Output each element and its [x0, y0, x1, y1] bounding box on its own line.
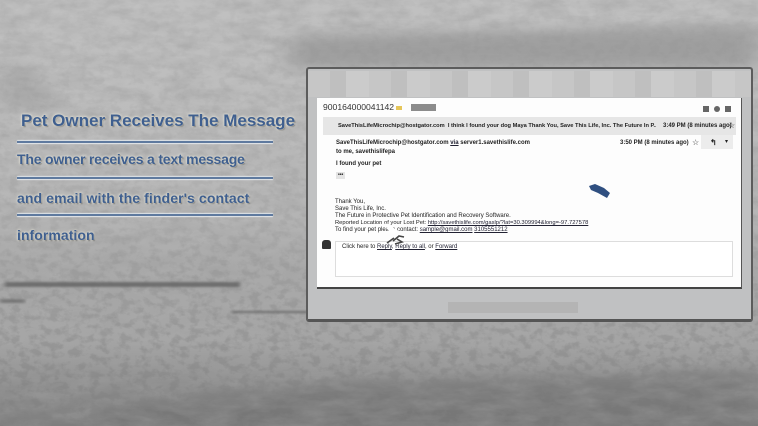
icon: folder tag [396, 106, 402, 110]
expanded message header: I found your pet [336, 161, 381, 167]
collapsed message row: 3:49 PM (8 minutes ago) [663, 123, 732, 129]
toolbar icons [703, 106, 731, 112]
expanded message header: ▾ [725, 139, 728, 145]
body line 2: and email with the finder's contact [17, 190, 249, 206]
message signature: Thank You, [335, 199, 365, 205]
body line 1: The owner receives a text message [17, 151, 245, 167]
frame shading blocks [448, 302, 578, 313]
expanded message header: SaveThisLifeMicrochip@hostgator.com via server1.savethislife.com [336, 140, 530, 146]
email id heading: 900164000041142 [323, 102, 394, 112]
icon: sender avatar [322, 240, 331, 249]
icon: cursor arrow [385, 224, 404, 245]
reply box: Click here to Reply, Reply to all, or Forward [342, 244, 457, 250]
message signature: To find your pet please contact: sample@gmail.com 3105551212 [335, 227, 508, 233]
message signature: Save This Life, Inc. [335, 206, 386, 212]
redacted label [411, 104, 436, 111]
icon: blue mark on email [589, 184, 610, 198]
email window [317, 98, 742, 289]
expanded message header: 3:50 PM (8 minutes ago) [620, 140, 689, 146]
message signature: The Future in Protective Pet Identification and Recovery Software. [335, 213, 511, 219]
expanded message header: to me, savethislifepa [336, 149, 395, 155]
body line 3: information [17, 227, 95, 243]
expanded message header: ↰ [710, 138, 717, 147]
message signature [335, 198, 588, 233]
collapsed message row: ☆ [728, 121, 735, 130]
text panel: pet owner message [16, 111, 296, 243]
message signature: Reported Location of your Lost Pet: http://savethislife.com/gaslp/?lat=30.309994&long=-97.727578 [335, 220, 588, 226]
email screenshot frame [306, 67, 753, 322]
heading: Pet Owner Receives The Message [21, 111, 295, 130]
expanded message header [336, 135, 733, 179]
collapsed message row [323, 117, 736, 135]
reply box [335, 241, 733, 277]
expanded message header: ☆ [692, 138, 699, 147]
expanded message header: ••• [338, 172, 343, 178]
dark streaks [5, 282, 240, 287]
collapsed message row: SaveThisLifeMicrochip@hostgator.com I think I found your dog Maya Thank You, Save This Life, Inc. The Future In P... [338, 123, 656, 129]
